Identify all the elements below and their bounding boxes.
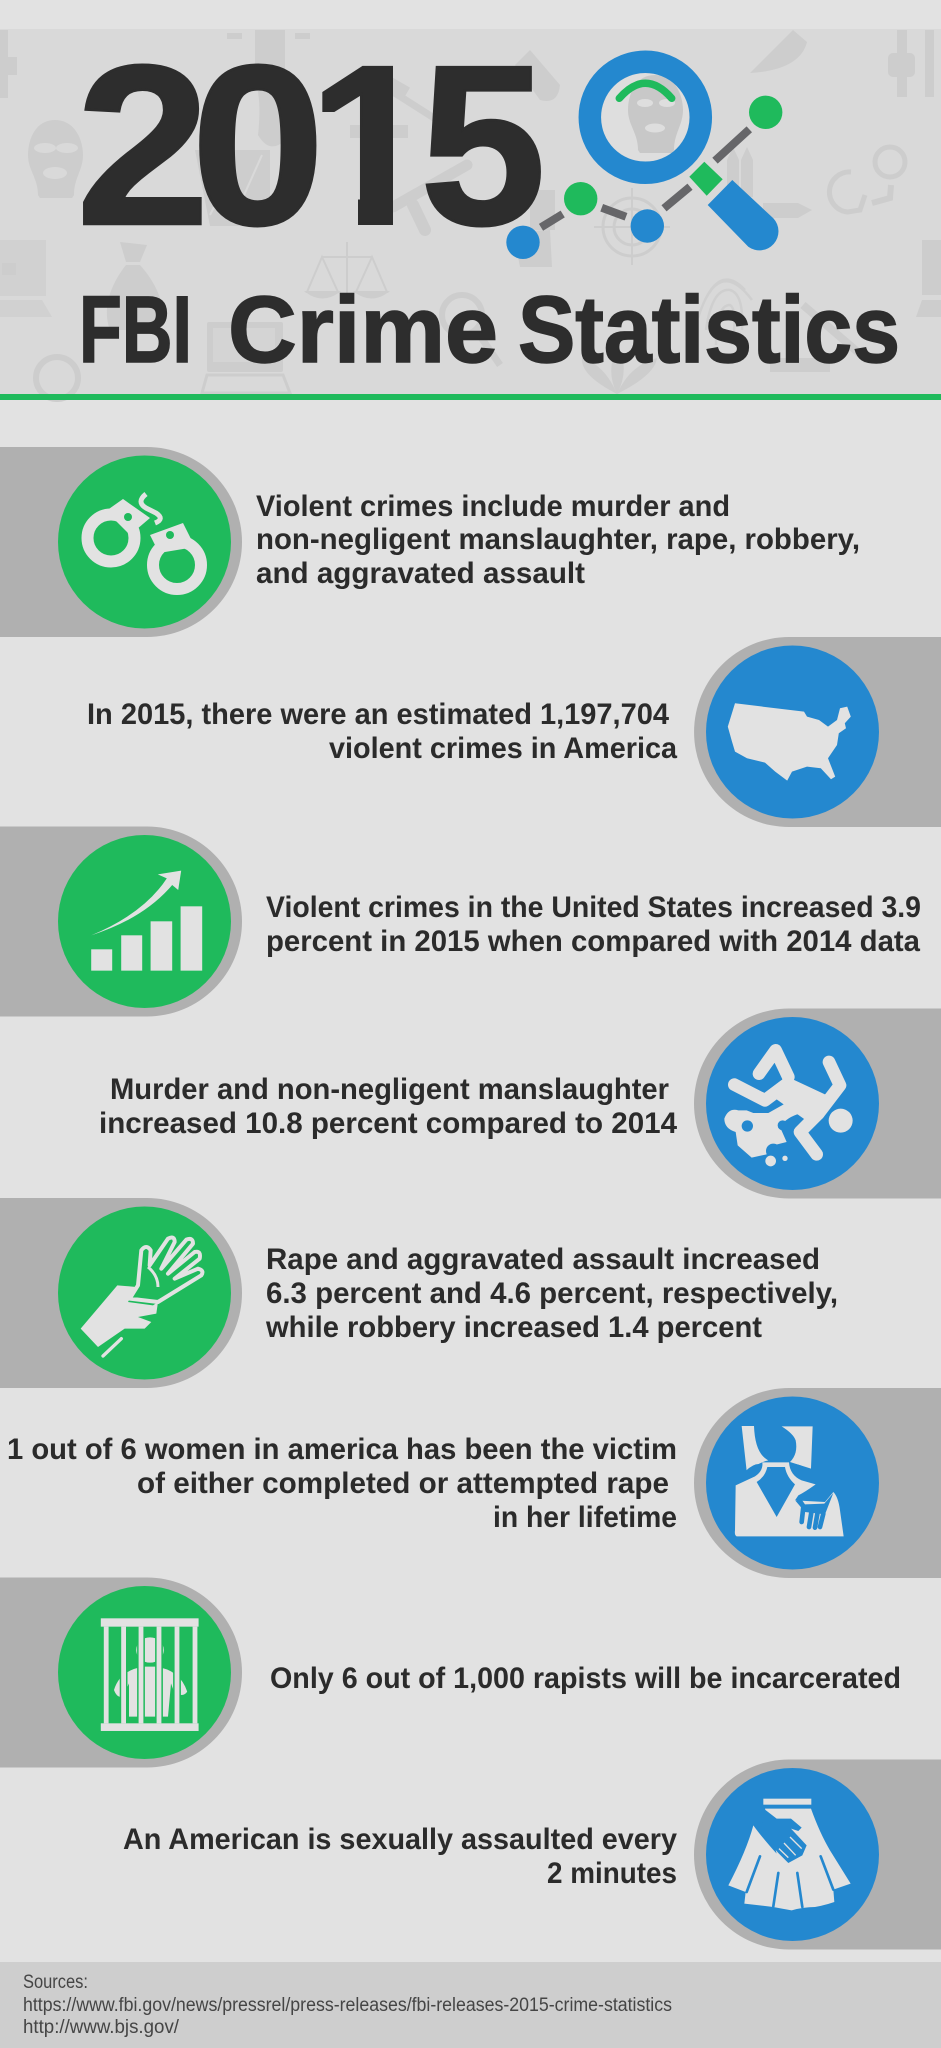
icon: gavel [350,73,445,138]
panel: 1 out of 6 women [7,1388,941,1578]
panel: incarceration [0,1578,901,1768]
magnifier lens [601,73,689,161]
text: definition: and aggravated assault [256,557,585,590]
text: women statistic [7,1433,677,1534]
magnifier handle [708,180,778,250]
text: estimate [87,698,677,765]
text: source links: http://www.bjs.gov/ [23,2017,180,2038]
text: rape and assault [265,1243,838,1344]
icon: knife [227,30,310,146]
text: murder: Murder and non-negligent manslaughter [110,1073,669,1106]
panel: rape and assault increase [0,1198,838,1388]
icon: baton [393,165,467,230]
icon: hand grabbing wrist [81,1238,202,1356]
main heading: 2015: 1 [308,19,435,273]
chart dots [506,96,782,259]
main heading: FBI Crime Statistics [79,277,900,383]
main heading: FBI Crime Statistics: FBI [79,277,192,383]
text: increase: Violent crimes in the United States increased 3.9 [266,891,921,924]
text: definition: Violent crimes include murder and [256,490,730,523]
text: every 2 minutes: An American is sexually assaulted every [123,1823,677,1856]
main heading: FBI Crime Statistics: Statistics [518,277,900,383]
icon: handcuffs [88,494,201,589]
text: source links: https://www.fbi.gov/news/pressrel/press-releases/fbi-releases-2015-crime-statistics [23,1995,672,2016]
icon: laptop middle [202,322,290,393]
text: rape and assault: 6.3 percent and 4.6 percent, respectively, [266,1277,838,1310]
icon: boot sole [513,190,555,267]
panel: 3.9 percent increase [0,826,921,1016]
header panel [0,19,941,399]
magnifier ring [590,62,701,173]
main heading: 2015: 2 [76,19,210,273]
icon: woman and groping hand [735,1426,844,1536]
text: murder [99,1073,677,1140]
icon: money bag [107,242,163,330]
background crime icons [0,30,941,399]
icon: bullets [727,147,812,218]
text: increase: percent in 2015 when compared with 2014 data [266,925,920,958]
main heading: FBI Crime Statistics: Crime [228,277,498,383]
text: source links [23,1972,672,2038]
logo: magnifier and chart line [506,62,782,259]
chart line segments [541,129,749,227]
panel: every 2 minutes [123,1760,941,1950]
icon: magnifier [442,295,500,365]
icon: laptop right [916,240,941,317]
text: definition: non-negligent manslaughter, rape, robbery, [256,523,860,556]
text: estimate: violent crimes in America [329,732,677,765]
text: women statistic: 1 out of 6 women in america has been the victim [7,1433,677,1466]
text: source links: Sources: [23,1972,88,1993]
icon: handcuffs background [829,147,905,212]
icon: ski mask [28,120,83,198]
footer: sources [0,1962,941,2048]
green header divider [0,394,941,400]
icon: rising bar chart [91,871,202,971]
panel: total violent crimes [87,637,941,827]
panel: violent crimes definition [0,447,860,637]
icon: fist on bars right [888,30,934,97]
text: women statistic: of either completed or attempted rape [137,1467,669,1500]
icon: leaf [582,345,657,394]
text: incarceration: Only 6 out of 1,000 rapists will be incarcerated [270,1662,901,1695]
text: women statistic: in her lifetime [493,1501,677,1534]
text: increase [266,891,921,958]
icon: laptop left [0,240,52,317]
green diamond [689,162,723,196]
icon: fist on bars left [0,30,17,98]
text: every 2 minutes [123,1823,677,1890]
icon: USA map [728,703,851,781]
text: definition [256,490,860,590]
icon: scales [307,242,387,298]
text: murder: increased 10.8 percent compared to 2014 [99,1107,677,1140]
icon: fingerprint [698,280,752,345]
icon: crosshair [594,188,670,265]
main heading: 2015 [83,64,541,228]
icon: hand on skirt [728,1799,851,1910]
text: estimate: In 2015, there were an estimated 1,197,704 [87,698,669,731]
icon: magnifier ring [36,357,78,399]
icon: shattered glass [195,150,270,226]
main heading: 2015: 5 [420,19,546,273]
text: rape and assault: while robbery increased 1.4 percent [265,1311,762,1344]
icon: gavel right [770,305,867,372]
icon: body and blood [724,1050,853,1166]
mask inside lens [628,75,683,153]
panel: murder increase [99,1008,941,1198]
text: rape and assault: Rape and aggravated assault increased [266,1243,820,1276]
icon: footprint [515,50,560,101]
green arc [619,83,672,98]
icon: prisoner behind bars [101,1618,199,1731]
text: every 2 minutes: 2 minutes [547,1857,677,1890]
main heading: 2015: 0 [191,19,325,273]
icon: knife top right [750,30,807,73]
